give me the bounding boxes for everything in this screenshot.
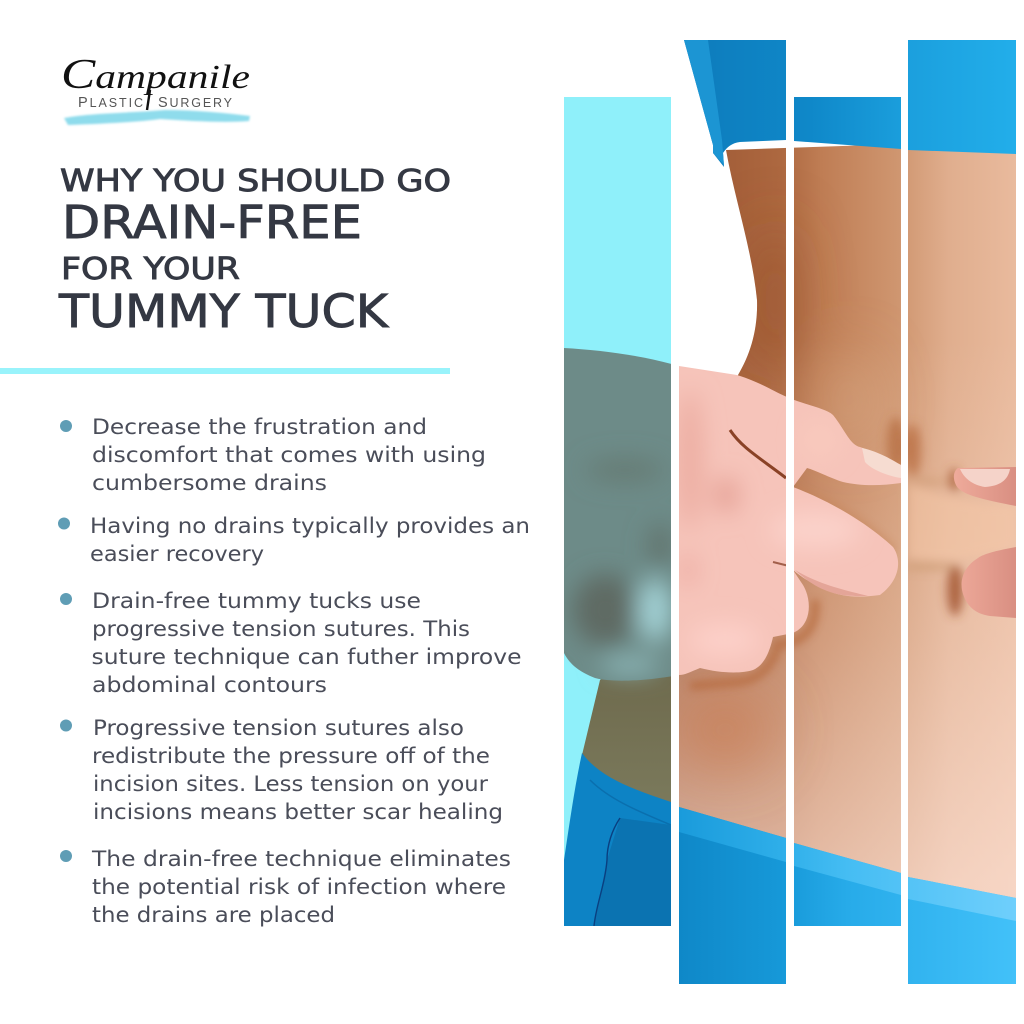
bullet 5 <box>60 847 511 928</box>
logo tagline right: SURGERY <box>158 95 233 111</box>
strip 1 pants <box>564 753 671 926</box>
logo: Campanile Plastic Surgery <box>61 52 250 125</box>
right nail <box>960 469 1010 487</box>
bullet 1: Decrease the frustration and <box>92 415 427 440</box>
hand crease <box>730 430 786 478</box>
photo strips 2 to 4 <box>679 40 1016 984</box>
strip 1 waistband line <box>590 780 671 825</box>
bullet 2: easier recovery <box>90 542 264 567</box>
bullet 3: progressive tension sutures. This <box>92 617 470 642</box>
bullet 2: Having no drains typically provides an <box>90 514 530 539</box>
divider rule <box>0 368 450 374</box>
bullet 2 <box>58 514 530 567</box>
bullet 3 <box>60 589 522 698</box>
navel and fold shading <box>882 414 968 621</box>
torso shadows <box>679 250 968 788</box>
strip 1 torso <box>582 676 671 802</box>
bullet 1: discomfort that comes with using <box>92 443 486 468</box>
bullet 4: incision sites. Less tension on your <box>93 772 488 797</box>
right finger upper <box>954 467 1016 506</box>
torso lighter lower fade <box>679 391 1016 898</box>
hand <box>679 366 901 675</box>
logo brush stroke <box>64 110 250 125</box>
title: TUMMY TUCK <box>58 285 390 338</box>
pants <box>660 800 1016 984</box>
fingernail left <box>862 448 901 478</box>
bullet 1: cumbersome drains <box>92 471 327 496</box>
photo strip 1: cyan tinted <box>564 97 671 926</box>
title: FOR YOUR <box>61 252 240 287</box>
title <box>58 164 451 338</box>
bullet 4: incisions means better scar healing <box>93 800 503 825</box>
finger underside <box>795 570 868 596</box>
bullet 5: The drain-free technique eliminates <box>91 847 511 872</box>
bullet 4: redistribute the pressure off of the <box>92 744 490 769</box>
hand shading <box>678 390 860 656</box>
hand shadow <box>690 600 815 686</box>
strip 1 forearm <box>564 348 679 681</box>
strip 1 darker panel <box>594 818 671 926</box>
knuckle crease <box>772 561 786 566</box>
logo p descender <box>147 90 150 110</box>
bullet 5: the potential risk of infection where <box>92 875 506 900</box>
title: WHY YOU SHOULD GO <box>60 164 451 199</box>
bullet 3: abdominal contours <box>92 673 327 698</box>
torso skin <box>660 140 1016 900</box>
finger top shadow <box>826 501 895 549</box>
logo script name: Campanile <box>61 52 250 98</box>
title: DRAIN-FREE <box>62 196 362 249</box>
bullet 4: Progressive tension sutures also <box>93 716 464 741</box>
bullet 4 <box>60 716 503 825</box>
strip 1 forearm shading <box>573 458 672 673</box>
bullet 3: Drain-free tummy tucks use <box>92 589 421 614</box>
bullet 1 <box>60 415 486 496</box>
pants waistband <box>679 807 1016 921</box>
strip 1 seam <box>594 818 620 926</box>
top garment side panel <box>684 40 724 165</box>
right finger lower <box>962 547 1016 618</box>
logo tagline left: PLASTIC <box>78 95 143 111</box>
bullet 3: suture technique can futher improve <box>92 645 522 670</box>
top garment <box>684 40 1016 167</box>
bullet 5: the drains are placed <box>92 903 335 928</box>
